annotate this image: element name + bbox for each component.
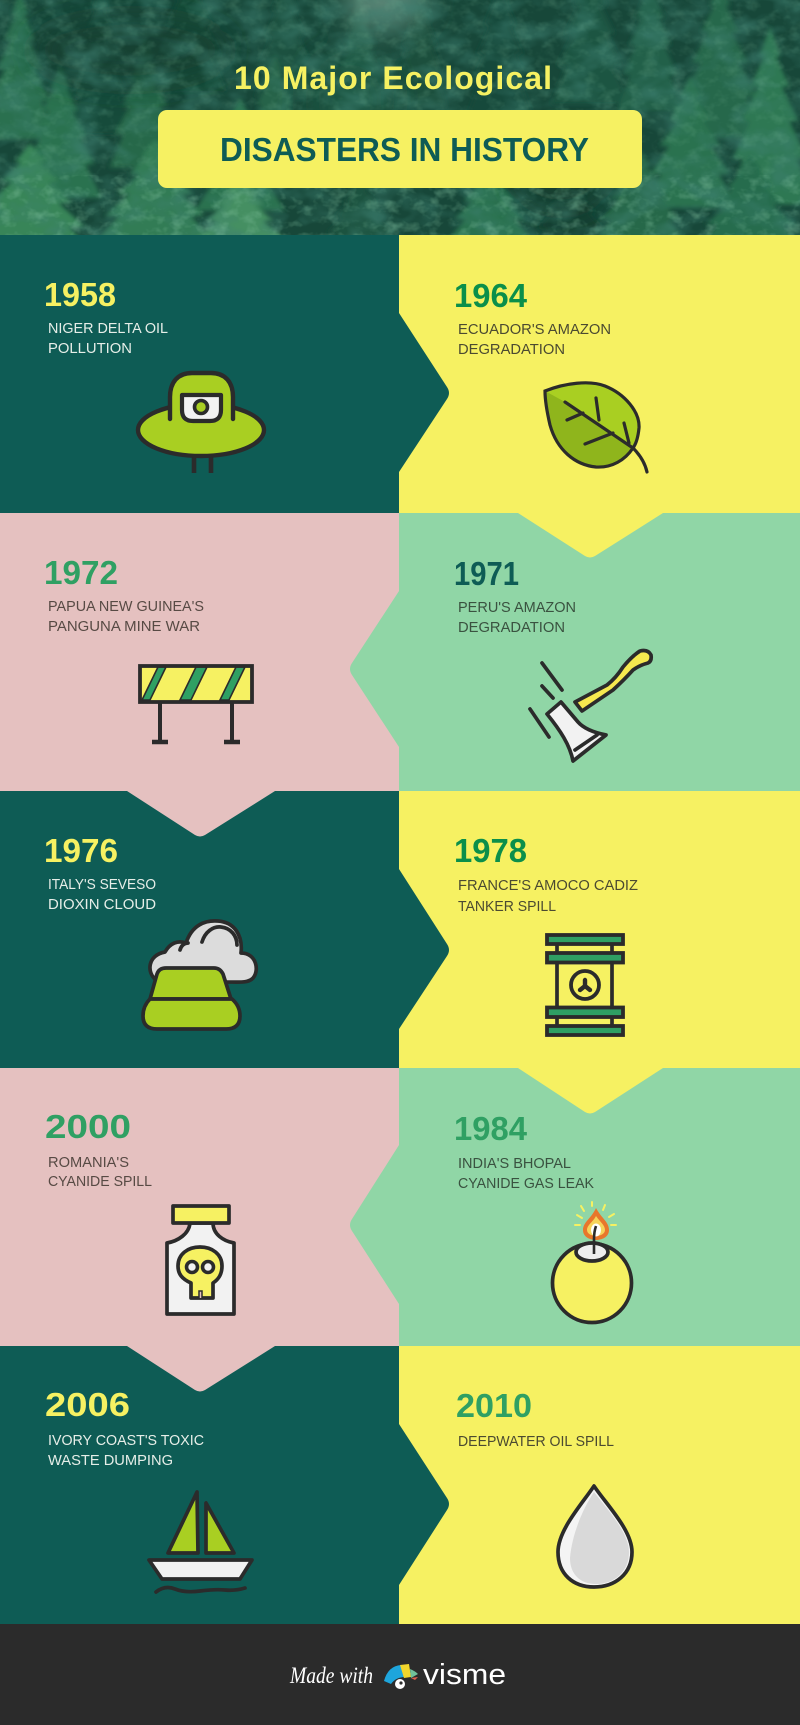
year 2006: 2006 [45, 1386, 130, 1423]
label: ITALY'S SEVESO [48, 877, 156, 893]
icon: road barrier [140, 666, 252, 742]
label line 2: CYANIDE GAS LEAK [458, 1176, 594, 1192]
label line 2: DEGRADATION [458, 342, 565, 358]
footer bar [0, 1624, 800, 1725]
panel: 1972 papua new guinea [0, 513, 399, 836]
icon: axe [530, 650, 651, 761]
year 1972: 1972 [44, 554, 118, 591]
label line 2: DIOXIN CLOUD [48, 897, 156, 913]
label line 2: TANKER SPILL [458, 899, 556, 915]
label: PERU'S AMAZON [458, 600, 576, 616]
icon: poison bottle [167, 1206, 234, 1314]
panel: 2006 ivory coast [0, 1346, 449, 1624]
panel: 1964 ecuador [399, 235, 800, 558]
panel: 2000 romania [0, 1068, 399, 1392]
label line 2: CYANIDE SPILL [48, 1174, 152, 1190]
icon: sailboat [149, 1492, 252, 1592]
icon: hazard suit ufo [138, 373, 264, 473]
label: INDIA'S BHOPAL [458, 1156, 571, 1172]
label line 2: WASTE DUMPING [48, 1453, 173, 1469]
footer: visme wordmark: visme [423, 1659, 506, 1691]
label: NIGER DELTA OIL [48, 321, 168, 337]
year 1971: 1971 [454, 555, 519, 592]
panel: 1976 italy [0, 791, 449, 1068]
banner heading: DISASTERS IN HISTORY [220, 131, 589, 168]
label: FRANCE'S AMOCO CADIZ [458, 878, 638, 894]
title banner [158, 110, 642, 188]
label: PAPUA NEW GUINEA'S [48, 599, 204, 615]
icon: leaf [545, 383, 647, 472]
icon: dioxin cloud [143, 921, 256, 1029]
year 1964: 1964 [454, 277, 528, 314]
title: 10 Major Ecological [234, 60, 552, 96]
icon: chemical drum [547, 935, 623, 1035]
year 1958: 1958 [44, 276, 116, 313]
icon: visme logo [384, 1664, 418, 1689]
header: forest photo [0, 0, 800, 261]
label line 2: POLLUTION [48, 341, 132, 357]
panel: 1971 peru [350, 513, 800, 791]
label line 2: DEGRADATION [458, 620, 565, 636]
label: ECUADOR'S AMAZON [458, 322, 611, 338]
panel: 2010 deepwater oil spill [399, 1346, 800, 1624]
panel: 1984 india [350, 1068, 800, 1346]
year 1978: 1978 [454, 832, 527, 869]
year 2010: 2010 [456, 1387, 532, 1424]
label line 2: PANGUNA MINE WAR [48, 619, 200, 635]
year 1984: 1984 [454, 1110, 528, 1147]
panel: 1978 france [399, 791, 800, 1114]
panel: 1958 niger delta [0, 235, 449, 513]
icon: oil drop [558, 1486, 632, 1587]
footer: made with: Made with [289, 1663, 373, 1688]
icon: candle bomb [552, 1202, 632, 1322]
label: ROMANIA'S [48, 1155, 129, 1171]
label: IVORY COAST'S TOXIC [48, 1433, 204, 1449]
label: DEEPWATER OIL SPILL [458, 1434, 614, 1450]
year 2000: 2000 [45, 1108, 131, 1145]
year 1976: 1976 [44, 832, 118, 869]
